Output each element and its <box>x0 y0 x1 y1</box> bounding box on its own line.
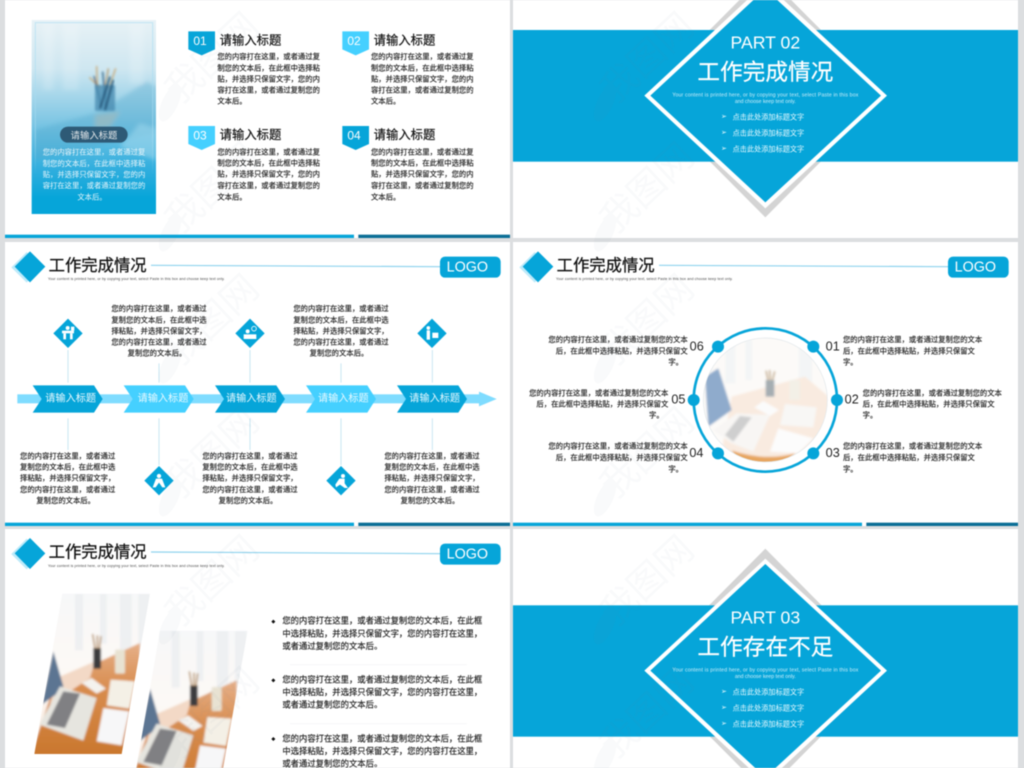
item 02 <box>845 388 1003 419</box>
chevron 1 <box>33 385 103 413</box>
item 06: 06 <box>690 339 704 353</box>
chevron 1: 请输入标题 <box>45 392 96 405</box>
item 01: 01 <box>826 339 840 353</box>
bullet 1: 或者通过复制您的文本后。 <box>282 641 382 651</box>
footer bars <box>5 523 510 526</box>
item 04: 文本后。 <box>371 192 400 201</box>
slide 6: PART 03 section divider <box>513 529 1018 768</box>
item 03 <box>188 126 321 201</box>
watermarks: 我图网 <box>592 135 702 241</box>
text block 2: 您的内容打在这里，或者通过 <box>111 304 207 313</box>
item 01: 容打在这里，或者通过复制您的 <box>217 85 320 94</box>
item 04: 容打在这里，或者通过复制您的 <box>371 181 474 190</box>
timeline arrow <box>17 392 497 406</box>
icon: person at desk <box>53 319 83 348</box>
item 01: 01 <box>193 34 207 48</box>
bullet list: ➢ <box>721 704 727 712</box>
item 04: 贴，并选择只保留文字，您的内 <box>371 170 474 179</box>
english note: and choose keep text only. <box>735 674 796 680</box>
english note <box>672 93 859 105</box>
item 04 <box>548 442 703 473</box>
item 06 <box>548 335 704 367</box>
chevron 4 <box>306 385 376 413</box>
bullet list: ➢ <box>721 688 727 696</box>
item 05 <box>529 388 685 419</box>
item 02: 容打在这里，或者通过复制您的 <box>371 85 474 94</box>
item 03: 贴，并选择只保留文字，您的内 <box>217 170 320 179</box>
photo panel <box>32 20 156 214</box>
bullet 2: 您的内容打在这里，或者通过复制您的文本后，在此框 <box>282 674 482 684</box>
bullet list: ➢ <box>721 145 727 153</box>
header: LOGO <box>955 260 996 276</box>
text block 1: 择粘贴，并选择只保留文字， <box>20 474 115 483</box>
watermarks: 我图网 <box>157 400 267 506</box>
item 04 <box>342 126 474 201</box>
english note: Your content is printed here, or by copying your text, select Paste in this box <box>672 93 859 99</box>
item 03: 后，在此框中选择粘贴，并选择只保留文 <box>843 453 976 462</box>
item 03: 字。 <box>843 464 858 473</box>
item 04: 您的内容打在这里，或者通过复制您的文本 <box>548 442 688 451</box>
header: Your content is printed here, or by copying your text, select Paste in this box and choose keep text only. <box>48 277 225 281</box>
header: Your content is printed here, or by copying your text, select Paste in this box and choose keep text only. <box>48 564 225 568</box>
item 03 <box>826 442 983 473</box>
bullet 1 <box>271 616 482 651</box>
header: LOGO <box>447 547 488 563</box>
panel text: 贴，并选择只保留文字，您的内 <box>43 170 145 179</box>
bullet list: 点击此处添加标题文字 <box>733 703 804 712</box>
item 01: 后，在此框中选择粘贴，并选择只保留文 <box>843 346 976 355</box>
photo 1 <box>30 591 153 758</box>
text block 5: 您的内容打在这里，或者通过 <box>384 451 480 460</box>
item 03: 文本后。 <box>217 192 247 201</box>
slide 3: timeline <box>5 242 510 526</box>
item 05: 字。 <box>649 410 664 419</box>
item 03: 03 <box>193 128 207 142</box>
text block 3: 您的内容打在这里，或者通过 <box>202 485 298 494</box>
item 01: 制您的文本后，在此框中选择粘 <box>217 63 321 72</box>
bullet list: 点击此处添加标题文字 <box>733 719 804 728</box>
header: 工作完成情况 <box>49 257 147 275</box>
text block 3: 复制您的文本后。 <box>219 496 277 505</box>
text block 3: 您的内容打在这里，或者通过 <box>202 451 298 460</box>
bullet 1: 中选择粘贴，并选择只保留文字，您的内容打在这里， <box>282 628 482 638</box>
watermarks: 我图网 <box>592 267 702 373</box>
english note: Your content is printed here, or by copying your text, select Paste in this box <box>672 668 859 674</box>
header: LOGO <box>447 260 488 276</box>
section title: 工作完成情况 <box>697 59 833 85</box>
item 04: 后，在此框中选择粘贴，并选择只保留文 <box>556 453 688 462</box>
english note: and choose keep text only. <box>735 99 796 105</box>
header <box>11 251 501 283</box>
bullet 3: 您的内容打在这里，或者通过复制您的文本后，在此框 <box>282 733 482 743</box>
text block 2: 您的内容打在这里，或者通过 <box>111 338 207 347</box>
pill label: 请输入标题 <box>71 129 117 140</box>
watermarks: 我图网 <box>157 660 267 766</box>
item 04: 您的内容打在这里，或者通过复 <box>371 148 474 157</box>
text block 2: 复制您的文本后，在此框中选 <box>111 315 207 324</box>
bullet list: 点击此处添加标题文字 <box>733 112 804 121</box>
text block 5: 复制您的文本后，在此框中选 <box>384 463 480 472</box>
item 05: 后，在此框中选择粘贴，并选择只保留文 <box>536 399 669 408</box>
text block 3: 复制您的文本后，在此框中选 <box>202 463 298 472</box>
bullet 3: 中选择粘贴，并选择只保留文字，您的内容打在这里， <box>282 746 482 756</box>
slide 1: four titled items <box>5 0 510 238</box>
footer bars <box>5 235 510 238</box>
text block 1: 复制您的文本后。 <box>36 496 95 505</box>
chevron 3: 请输入标题 <box>226 392 277 405</box>
section title: 工作存在不足 <box>697 634 833 660</box>
bullet 1: 您的内容打在这里，或者通过复制您的文本后，在此框 <box>282 616 482 626</box>
text block 2: 复制您的文本后。 <box>128 349 186 358</box>
slide 2: PART 02 section divider <box>513 0 1018 238</box>
bullet list: 点击此处添加标题文字 <box>733 144 804 153</box>
text block 5: 择粘贴，并选择只保留文字， <box>384 474 480 483</box>
watermarks: 我图网 <box>592 400 702 506</box>
part heading: PART 02 <box>730 32 800 52</box>
bullet list: 点击此处添加标题文字 <box>733 128 804 137</box>
ring with nodes <box>688 328 843 472</box>
text block 1: 您的内容打在这里，或者通过 <box>20 451 116 460</box>
watermarks <box>154 5 702 768</box>
english note <box>672 668 859 680</box>
text block 3: 择粘贴，并选择只保留文字， <box>202 474 298 483</box>
item 04: 字。 <box>668 464 683 473</box>
icon: meeting <box>235 319 265 348</box>
item 03: 您的内容打在这里，或者通过复制您的文本 <box>843 442 983 451</box>
item 06: 您的内容打在这里，或者通过复制您的文本 <box>548 335 688 344</box>
item 02: 您的内容打在这里，或者通过复制您的文本 <box>863 388 1003 397</box>
chevron 2 <box>124 385 194 413</box>
item 01 <box>188 31 321 105</box>
bullet list <box>721 687 804 728</box>
chevron 2: 请输入标题 <box>138 392 188 405</box>
text block 4: 择粘贴，并选择只保留文字， <box>293 326 389 335</box>
item 03: 制您的文本后，在此框中选择粘 <box>217 159 321 168</box>
header: Your content is printed here, or by copying your text, select Paste in this box and choose keep text only. <box>556 277 733 281</box>
text block 5: 复制您的文本后。 <box>401 496 459 505</box>
watermarks: 我图网 <box>592 528 702 634</box>
circular photo <box>704 341 828 462</box>
item 02: 文本后。 <box>371 96 400 105</box>
panel text: 制您的文本后，在此框中选择粘 <box>43 159 146 168</box>
item 01 <box>826 335 983 367</box>
item 04: 请输入标题 <box>374 127 435 142</box>
bullet list: ➢ <box>721 129 727 137</box>
text block 1: 复制您的文本后，在此框中选 <box>20 463 116 472</box>
item 06: 后，在此框中选择粘贴，并选择只保留文 <box>556 346 688 355</box>
bullet 2 <box>271 674 482 710</box>
icon: running figure <box>326 466 356 495</box>
item 01: 您的内容打在这里，或者通过复制您的文本 <box>843 335 983 344</box>
item 02: 02 <box>845 393 859 407</box>
item 05: 您的内容打在这里，或者通过复制您的文本 <box>529 388 669 397</box>
item 02: 贴，并选择只保留文字，您的内 <box>371 74 474 83</box>
chevron 5: 请输入标题 <box>409 392 460 405</box>
item 02: 字。 <box>863 410 877 419</box>
bullet list <box>721 112 804 153</box>
watermarks: 我图网 <box>157 5 267 111</box>
panel text: 您的内容打在这里，或者通过复 <box>43 148 146 157</box>
text block 5: 您的内容打在这里，或者通过 <box>384 485 480 494</box>
slide 5: photos and bullet text <box>5 529 510 768</box>
item 01: 文本后。 <box>217 96 247 105</box>
chevron 3 <box>215 385 285 413</box>
item 01: 贴，并选择只保留文字，您的内 <box>217 74 320 83</box>
photo 2 <box>136 631 247 768</box>
item 01: 您的内容打在这里，或者通过复 <box>217 52 321 61</box>
part heading: PART 03 <box>730 607 800 627</box>
item 01: 请输入标题 <box>220 32 281 47</box>
bullet 3 <box>271 733 482 768</box>
watermarks: 我图网 <box>592 5 702 111</box>
connector lines <box>68 350 432 465</box>
header: 工作完成情况 <box>49 544 147 562</box>
item 04: 制您的文本后，在此框中选择粘 <box>371 159 474 168</box>
bullet 2: 中选择粘贴，并选择只保留文字，您的内容打在这里， <box>282 687 482 697</box>
item 02: 制您的文本后，在此框中选择粘 <box>371 63 474 72</box>
watermarks: 我图网 <box>157 267 267 373</box>
text block 4: 复制您的文本后，在此框中选 <box>293 315 389 324</box>
text block 4: 您的内容打在这里，或者通过 <box>293 338 389 347</box>
panel text: 文本后。 <box>77 192 107 201</box>
item 06: 字。 <box>668 358 683 367</box>
text block 4: 您的内容打在这里，或者通过 <box>293 304 389 313</box>
footer bars <box>513 523 1018 526</box>
chevron 5 <box>397 385 467 413</box>
bullet list: 点击此处添加标题文字 <box>733 687 804 696</box>
header <box>11 538 501 569</box>
slide 4: circular diagram <box>513 242 1018 526</box>
item 03: 容打在这里，或者通过复制您的 <box>217 181 320 190</box>
text block 1: 您的内容打在这里，或者通过 <box>20 485 116 494</box>
header: 工作完成情况 <box>557 257 655 275</box>
header <box>519 251 1009 283</box>
icon: seated figure <box>144 466 174 495</box>
chevron 4: 请输入标题 <box>318 392 369 405</box>
item 03: 03 <box>826 446 840 460</box>
bullet list: ➢ <box>721 720 727 728</box>
watermarks: 我图网 <box>157 135 267 241</box>
item 02: 后，在此框中选择粘贴，并选择只保留文 <box>863 399 995 408</box>
item 02: 您的内容打在这里，或者通过复 <box>371 52 474 61</box>
watermarks: 我图网 <box>592 660 702 766</box>
item 04: 04 <box>347 128 361 142</box>
bullet 2: 或者通过复制您的文本后。 <box>282 700 382 710</box>
icon: person with cart <box>417 319 447 348</box>
text block 2: 择粘贴，并选择只保留文字， <box>111 326 207 335</box>
bullet list: ➢ <box>721 113 727 121</box>
text block 4: 复制您的文本后。 <box>310 349 368 358</box>
item 04: 04 <box>689 446 703 460</box>
panel text: 容打在这里，或者通过复制您的 <box>43 181 145 190</box>
item 01: 字。 <box>843 358 858 367</box>
item 03: 请输入标题 <box>220 127 281 142</box>
pill label <box>60 127 128 143</box>
item 02: 02 <box>347 34 361 48</box>
item 03: 您的内容打在这里，或者通过复 <box>217 148 321 157</box>
panel text <box>43 148 146 201</box>
item 02 <box>342 31 474 105</box>
item 02: 请输入标题 <box>374 32 435 47</box>
watermarks: 我图网 <box>157 528 267 634</box>
item 05: 05 <box>671 393 685 407</box>
